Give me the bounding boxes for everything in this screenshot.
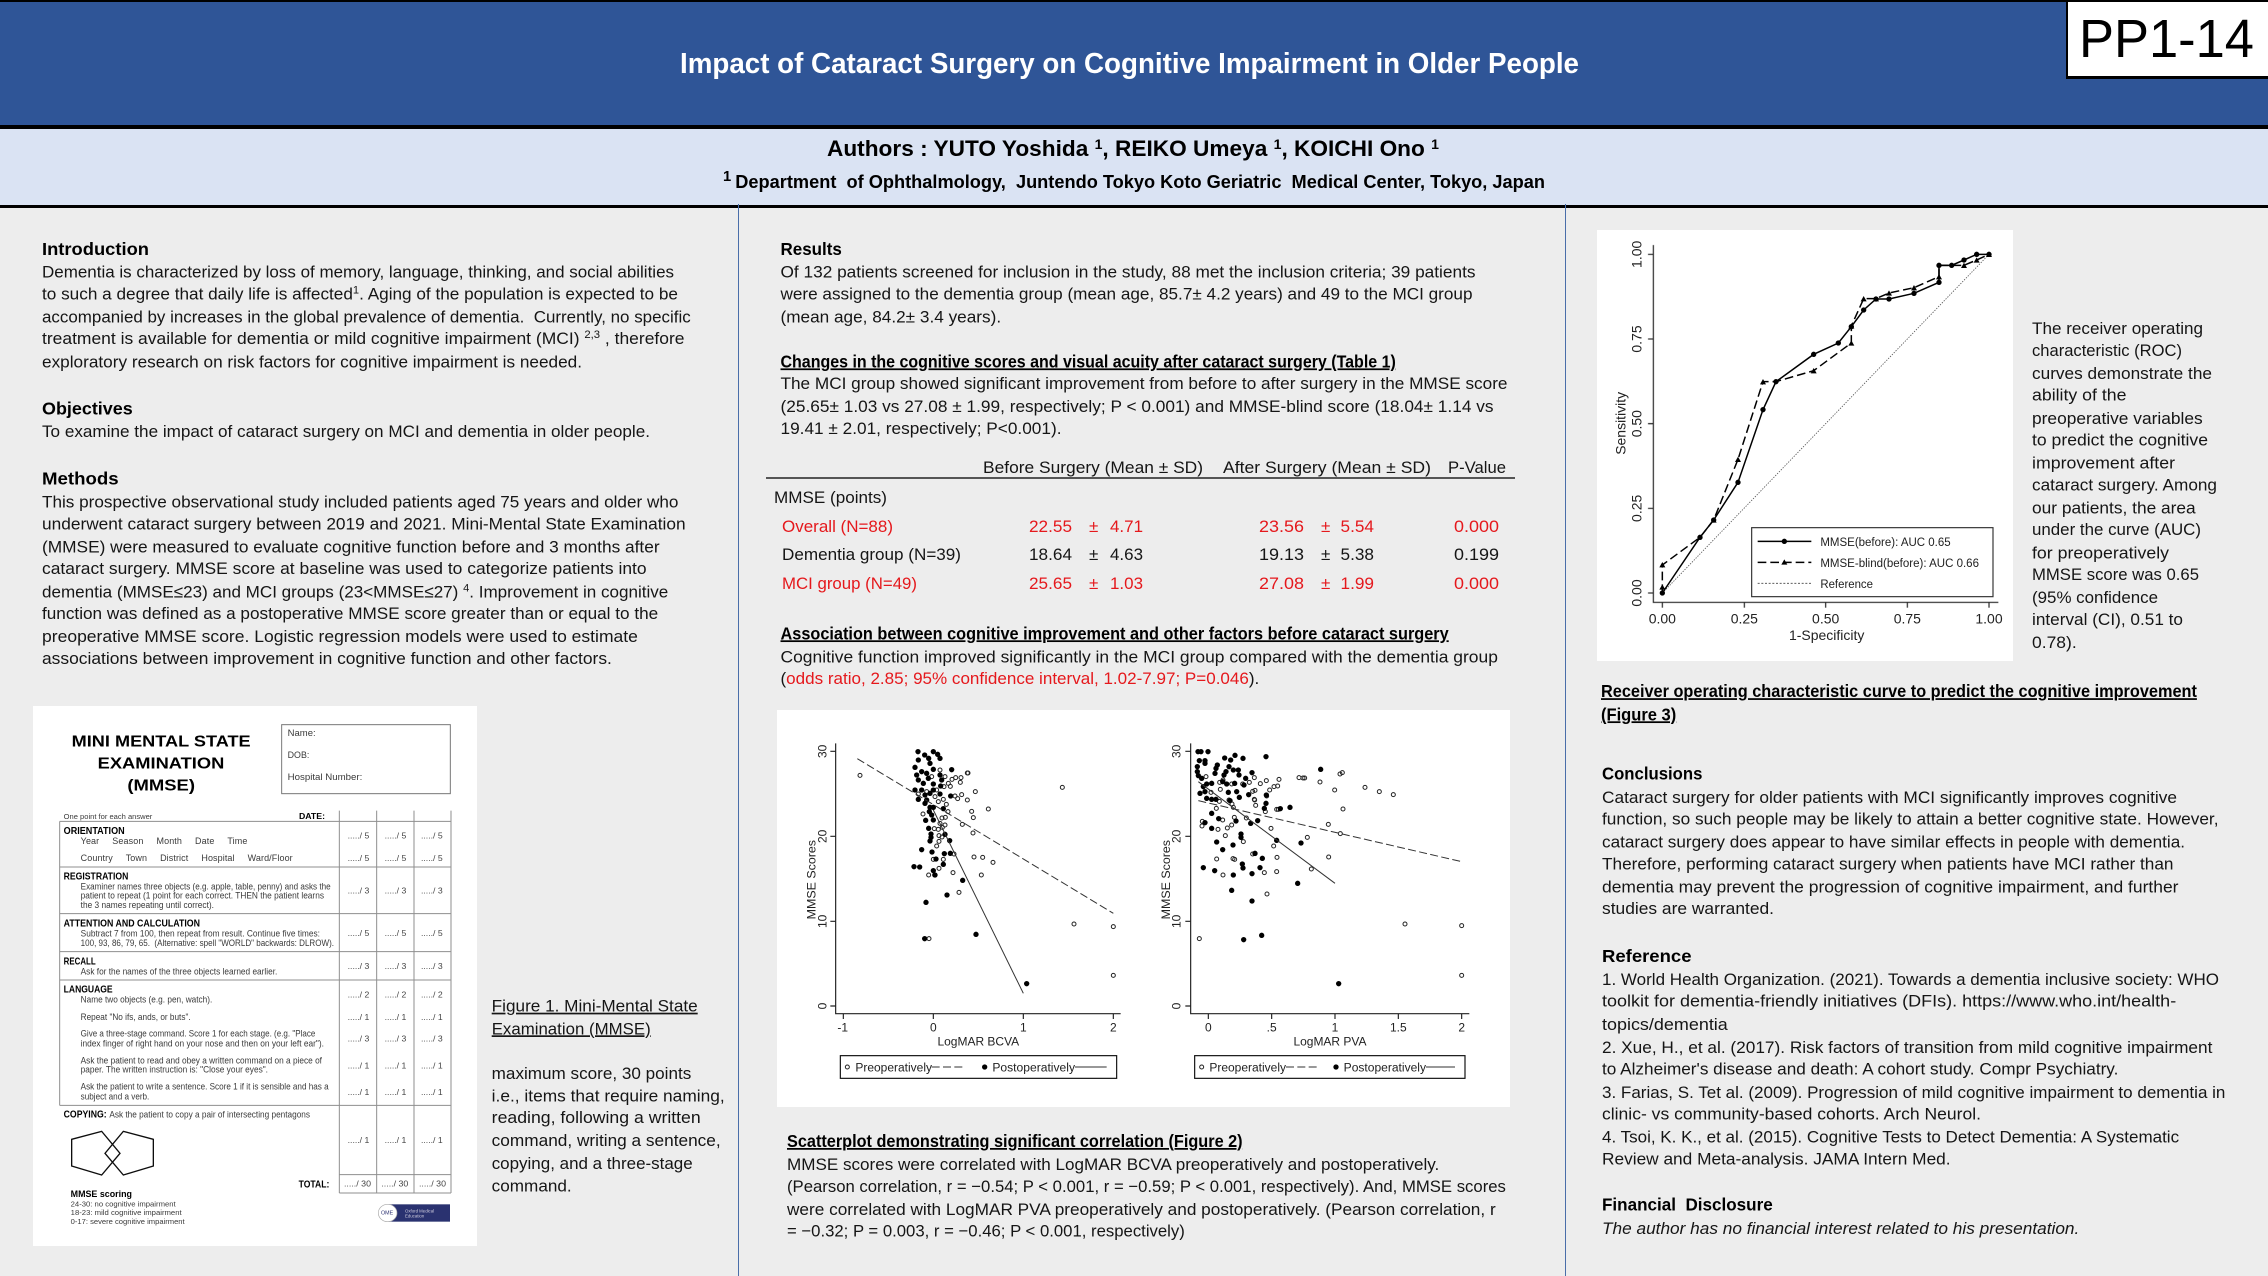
- row: overall: [782, 517, 1499, 536]
- table text: LANGUAGE: [64, 985, 113, 996]
- axis labels: 0.75: [1629, 325, 1645, 353]
- legend: Reference: [1820, 577, 1873, 591]
- patient details box: Name:: [288, 728, 316, 738]
- axis labels: 0.00: [1629, 579, 1645, 607]
- table text: Ask the patient to write a sentence. Score 1 if it is sensible and has a: [81, 1082, 329, 1092]
- icon: intersecting pentagons: [72, 1131, 153, 1175]
- text: ROC description: improvement after: [2032, 454, 2175, 473]
- legend: [1195, 1056, 1465, 1078]
- header banner: [0, 0, 2268, 129]
- table text: TOTAL:: [299, 1179, 329, 1190]
- table text: subject and a verb.: [81, 1091, 149, 1101]
- figure 1 caption: [492, 997, 725, 1196]
- row: overall: 22.55: [1029, 517, 1072, 536]
- legend: Postoperatively: [1344, 1061, 1426, 1075]
- text: ROC description: under the curve (AUC): [2032, 520, 2201, 539]
- axis labels: 0: [816, 1002, 830, 1009]
- figure 1 caption: maximum score, 30 points: [492, 1064, 691, 1083]
- column dividers: [738, 204, 1566, 1276]
- axis labels: 2: [1110, 1021, 1117, 1035]
- table text: Examiner names three objects (e.g. apple, table, penny) and asks the: [81, 881, 331, 891]
- authors: 1: [1431, 136, 1439, 152]
- text: results: (mean age, 84.2± 3.4 years).: [780, 308, 1001, 326]
- axis labels: 0.75: [1894, 610, 1921, 626]
- legend: [1752, 528, 1993, 597]
- postoperative points: [1195, 749, 1341, 986]
- figure 2 panel: [777, 710, 1510, 1107]
- figure 1 caption: reading, following a written: [492, 1108, 701, 1127]
- score columns: ...../ 1: [348, 1012, 369, 1022]
- axis labels: LogMAR BCVA: [937, 1035, 1019, 1049]
- row: dementia group: 4.63: [1110, 545, 1143, 564]
- MMSE scoring key: 0-17: severe cognitive impairment: [71, 1217, 186, 1226]
- patient details box: Hospital Number:: [288, 772, 362, 782]
- score columns: ...../ 3: [385, 1034, 406, 1044]
- curve: MMSE-blind before: [1659, 252, 1992, 593]
- text: methods: dementia (MMSE≤23) and MCI groups (23<MMSE≤27): [42, 582, 457, 601]
- text: methods: Methods: [42, 468, 119, 488]
- text: introduction: 1: [353, 284, 359, 296]
- score columns: ...../ 3: [385, 885, 406, 895]
- row: MCI group: MCI group (N=49): [782, 574, 917, 593]
- axis labels: MMSE Scores: [805, 840, 819, 919]
- score columns: ...../ 1: [348, 1135, 369, 1145]
- row: overall: 0.000: [1454, 517, 1499, 536]
- text: methods: 4: [463, 582, 469, 594]
- row: dementia group: ±: [1089, 545, 1098, 564]
- table header: After Surgery (Mean ± SD): [1223, 458, 1431, 477]
- table text: DATE:: [299, 811, 325, 821]
- table 1: MMSE before and after surgery: MMSE (points): [774, 488, 887, 507]
- table text: Give a three-stage command. Score 1 for each stage. (e.g. "Place: [81, 1029, 315, 1039]
- text: ROC description: MMSE score was 0.65: [2032, 565, 2199, 584]
- row: overall: 23.56: [1259, 517, 1304, 536]
- text: changes in cognitive scores: [780, 351, 1508, 438]
- legend: MMSE(before): AUC 0.65: [1820, 535, 1951, 549]
- text: conclusions: Cataract surgery for older patients with MCI significantly improves cognitive: [1602, 788, 2177, 807]
- text: changes in cognitive scores: Changes in the cognitive scores and visual acuity after cataract surgery (Table 1): [780, 351, 1396, 371]
- text: association: [780, 623, 1498, 688]
- axis labels: 0.25: [1629, 494, 1645, 522]
- text: introduction: exploratory research on risk factors for cognitive impairment is needed.: [42, 352, 582, 371]
- table text: REGISTRATION: [64, 871, 128, 882]
- text: results: Results: [780, 239, 842, 259]
- figure 1 caption: copying, and a three-stage: [492, 1154, 693, 1173]
- score columns: ...../ 5: [348, 853, 369, 863]
- authors: , KOICHI Ono: [1281, 136, 1431, 161]
- figure 3 caption: Receiver operating characteristic curve to predict the cognitive improvement: [1601, 681, 2197, 701]
- text: ROC description: interval (CI), 0.51 to: [2032, 610, 2183, 629]
- axis labels: 1: [1020, 1021, 1027, 1035]
- preoperative points: [858, 768, 1115, 977]
- form title: [72, 734, 251, 795]
- axis labels: 1: [1332, 1021, 1339, 1035]
- curve: MMSE before: [1660, 252, 1992, 596]
- table text: the 3 names repeating until correct).: [81, 900, 214, 910]
- axis labels: 0.50: [1812, 610, 1839, 626]
- icon: publisher logo: Oxford Medical: [405, 1208, 434, 1213]
- axis labels: 0: [930, 1021, 937, 1035]
- figure 2 caption: (Pearson correlation, r = −0.54; P < 0.001, r = −0.59; P < 0.001, respectively). And, MMSE scores: [787, 1177, 1506, 1196]
- row: dementia group: 19.13: [1259, 545, 1304, 564]
- text: objectives: To examine the impact of cataract surgery on MCI and dementia in older people.: [42, 422, 650, 441]
- affiliation: Department of Ophthalmology, Juntendo Tokyo Koto Geriatric Medical Center, Tokyo, Japan: [735, 171, 1545, 192]
- text: conclusions: [1602, 764, 2218, 918]
- score columns: ...../ 1: [385, 1060, 406, 1070]
- text: conclusions: cataract surgery does appear to have similar effects in people with dementia.: [1602, 833, 2185, 852]
- authors: , REIKO Umeya: [1102, 136, 1274, 161]
- axes: [830, 743, 1121, 1019]
- text: financial disclosure: [1602, 1195, 2079, 1238]
- trend lines: [857, 759, 1113, 993]
- score columns: ...../ 3: [421, 885, 443, 895]
- text: financial disclosure: Financial Disclosure: [1602, 1195, 1773, 1215]
- row: dementia group: ±: [1321, 545, 1330, 564]
- form title: (MMSE): [127, 778, 195, 795]
- text: conclusions: function, so such people may be likely to attain a better cognitive state. However,: [1602, 809, 2218, 828]
- score columns: ...../ 1: [421, 1135, 443, 1145]
- axis labels: MMSE Scores: [1159, 840, 1173, 919]
- axis labels: [1613, 241, 2003, 643]
- text: references: Review and Meta-analysis. JAMA Intern Med.: [1602, 1149, 1951, 1168]
- text: association: Cognitive function improved significantly in the MCI group compared with the dementia group: [780, 648, 1498, 666]
- text: methods: cataract surgery. MMSE score at baseline was used to categorize patients into: [42, 559, 647, 578]
- table text: COPYING:: [64, 1110, 107, 1121]
- table text: paper. The written instruction is: "Close your eyes".: [81, 1065, 268, 1075]
- legend: Postoperatively: [992, 1061, 1075, 1075]
- row: MCI group: ±: [1089, 574, 1098, 593]
- score columns: ...../ 1: [385, 1087, 406, 1097]
- table text: 100, 93, 86, 79, 65. (Alternative: spell "WORLD" backwards: DLROW).: [81, 938, 334, 948]
- text: methods: function was defined as a postoperative MMSE score greater than or equal to the: [42, 604, 658, 623]
- score columns: ...../ 2: [348, 989, 369, 999]
- row: MCI group: 25.65: [1029, 574, 1072, 593]
- figure 2 caption: Scatterplot demonstrating significant correlation (Figure 2): [787, 1131, 1243, 1151]
- authors: 1: [1095, 136, 1103, 152]
- table 1: MMSE before and after surgery: [766, 458, 1515, 593]
- text: references: 2. Xue, H., et al. (2017). Risk factors of transition from mild cognitive impairment: [1602, 1038, 2213, 1057]
- axis labels: 20: [816, 829, 830, 843]
- text: association: (odds ratio, 2.85; 95% confidence interval, 1.02-7.97; P=0.046).: [780, 669, 1259, 688]
- scatterplot: LogMAR BCVA: [805, 743, 1121, 1078]
- axis labels: -1: [837, 1021, 848, 1035]
- score columns: ...../ 1: [421, 1087, 443, 1097]
- text: methods: [42, 468, 686, 668]
- legend: Preoperatively: [1209, 1061, 1286, 1075]
- row: MCI group: 27.08: [1259, 574, 1304, 593]
- row: MCI group: 1.03: [1110, 574, 1143, 593]
- row: overall: 5.54: [1340, 517, 1374, 536]
- axis labels: 0.00: [1649, 610, 1676, 626]
- table text: ORIENTATION: [64, 826, 125, 837]
- poster number badge: PP1-14: [2079, 9, 2254, 69]
- MMSE scoring key: [71, 1189, 186, 1226]
- figure 1 caption: Figure 1. Mini-Mental State: [492, 997, 698, 1016]
- text: references: [1602, 946, 2225, 1168]
- text: references: Reference: [1602, 946, 1692, 966]
- preoperative points: [1197, 771, 1464, 977]
- score columns: ...../ 5: [421, 853, 443, 863]
- figure 1 caption: command, writing a sentence,: [492, 1131, 721, 1150]
- axis labels: 1.00: [1975, 610, 2003, 626]
- score columns: ...../ 30: [344, 1179, 371, 1189]
- figure 1 caption: command.: [492, 1177, 572, 1196]
- axis labels: LogMAR PVA: [1293, 1035, 1367, 1049]
- table grid: [60, 811, 451, 1193]
- authors: 1: [1274, 136, 1282, 152]
- score columns: ...../ 5: [421, 831, 443, 841]
- score columns: ...../ 2: [421, 989, 443, 999]
- text: ROC description: our patients, the area: [2032, 498, 2196, 518]
- text: introduction: accompanied by increases in the global prevalence of dementia. Currently, no specific: [42, 308, 691, 326]
- text: changes in cognitive scores: The MCI group showed significant improvement from before to after surgery in the MMSE score: [780, 374, 1508, 393]
- table text: One point for each answer: [64, 812, 153, 821]
- row: MCI group: 1.99: [1340, 574, 1374, 593]
- icon: publisher logo: [378, 1204, 450, 1222]
- text: introduction: [42, 239, 691, 371]
- table text: Ask for the names of the three objects learned earlier.: [81, 966, 277, 976]
- score columns: ...../ 2: [385, 989, 406, 999]
- score columns: ...../ 5: [385, 928, 406, 938]
- table text: ATTENTION AND CALCULATION: [64, 919, 200, 930]
- text: methods: . Improvement in cognitive: [469, 582, 668, 601]
- text: changes in cognitive scores: (25.65± 1.03 vs 27.08 ± 1.99, respectively; P < 0.001) and MMSE-blind score (18.04± 1.14 vs: [780, 397, 1494, 416]
- score columns: ...../ 3: [348, 1034, 369, 1044]
- score columns: ...../ 1: [421, 1012, 443, 1022]
- axis labels: .5: [1267, 1021, 1277, 1035]
- text: conclusions: studies are warranted.: [1602, 899, 1774, 918]
- text: methods: (MMSE) were measured to evaluate cognitive function before and 3 months after: [42, 538, 660, 556]
- text: objectives: [42, 398, 650, 441]
- text: references: 3. Farias, S. Tet al. (2009). Progression of mild cognitive impairment to dementia in: [1602, 1083, 2225, 1102]
- row: dementia group: 18.64: [1029, 545, 1072, 564]
- authors band: [0, 129, 2268, 208]
- scatterplot: LogMAR PVA: [1159, 743, 1469, 1078]
- figure 2 caption: were correlated with LogMAR PVA preoperatively and postoperatively. (Pearson correlation, r: [786, 1200, 1496, 1219]
- text: financial disclosure: The author has no financial interest related to his presentation.: [1602, 1219, 2079, 1238]
- text: references: topics/dementia: [1602, 1015, 1728, 1034]
- text: references: toolkit for dementia-friendly initiatives (DFIs). https://www.who.int/health-: [1602, 992, 2176, 1011]
- text: introduction: , therefore: [600, 329, 684, 348]
- text: ROC description: characteristic (ROC): [2032, 341, 2182, 360]
- MMSE scoring key: 24-30: no cognitive impairment: [71, 1199, 177, 1208]
- text: changes in cognitive scores: 19.41 ± 2.01, respectively; P<0.001).: [780, 419, 1062, 438]
- text: ROC description: curves demonstrate the: [2032, 364, 2212, 383]
- text: results: [779, 239, 1476, 326]
- figure 1 caption: Examination (MMSE): [492, 1019, 651, 1038]
- score columns: ...../ 5: [348, 831, 369, 841]
- score columns: ...../ 3: [421, 1034, 443, 1044]
- table text: Year Season Month Date Time: [81, 836, 247, 846]
- axis labels: 30: [1170, 744, 1184, 758]
- row: MCI group: 0.000: [1454, 574, 1499, 593]
- text: references: 4. Tsoi, K. K., et al. (2015). Cognitive Tests to Detect Dementia: A Systematic: [1602, 1128, 2180, 1147]
- score columns: ...../ 30: [381, 1179, 409, 1189]
- table header: Before Surgery (Mean ± SD): [983, 458, 1203, 477]
- legend: MMSE-blind(before): AUC 0.66: [1820, 556, 1979, 570]
- score columns: ...../ 1: [348, 1060, 369, 1070]
- trend lines: [1198, 782, 1462, 883]
- score columns: ...../ 5: [421, 928, 443, 938]
- text: methods: associations between improvement in cognitive function and other factors.: [42, 649, 612, 668]
- axis labels: 0: [1205, 1021, 1212, 1035]
- form title: EXAMINATION: [98, 755, 224, 772]
- axis labels: [1159, 744, 1465, 1049]
- icon: publisher logo: OME: [381, 1211, 394, 1217]
- text: conclusions: Conclusions: [1602, 764, 1703, 784]
- score columns: ...../ 5: [385, 831, 406, 841]
- axis labels: 1.5: [1390, 1021, 1407, 1035]
- score columns: ...../ 1: [348, 1087, 369, 1097]
- row: dementia group: Dementia group (N=39): [782, 545, 961, 564]
- text: ROC description: (95% confidence: [2032, 588, 2158, 607]
- axis labels: 20: [1170, 829, 1184, 843]
- text: references: to Alzheimer's disease and death: A cohort study. Compr Psychiatry.: [1602, 1060, 2118, 1079]
- axis labels: 1.00: [1629, 241, 1645, 268]
- table text: [64, 811, 334, 1190]
- row: overall: 4.71: [1110, 517, 1143, 536]
- text: introduction: Dementia is characterized by loss of memory, language, thinking, and social abilities: [42, 263, 674, 282]
- text: results: were assigned to the dementia group (mean age, 85.7± 4.2 years) and 49 to the MCI group: [779, 284, 1472, 303]
- figure 3 panel: ROC curve: [1597, 230, 2013, 661]
- authors: Authors : YUTO Yoshida: [827, 136, 1087, 161]
- score columns: ...../ 30: [419, 1179, 446, 1189]
- table text: index finger of right hand on your nose and then on your left ear").: [81, 1038, 324, 1048]
- text: ROC description: to predict the cognitive: [2032, 430, 2208, 450]
- table text: Name two objects (e.g. pen, watch).: [81, 995, 212, 1005]
- text: ROC description: for preoperatively: [2032, 543, 2170, 562]
- axes: [1648, 245, 1998, 608]
- row: MCI group: ±: [1321, 574, 1330, 593]
- axis labels: 1-Specificity: [1789, 627, 1864, 643]
- axis labels: 10: [816, 914, 830, 928]
- axis labels: Sensitivity: [1613, 392, 1629, 455]
- row: overall: Overall (N=88): [782, 517, 893, 536]
- row: overall: ±: [1321, 517, 1330, 536]
- text: ROC description: cataract surgery. Among: [2032, 475, 2217, 494]
- figure 3 caption: (Figure 3): [1601, 704, 1676, 724]
- score columns: ...../ 1: [385, 1012, 406, 1022]
- legend: Preoperatively: [855, 1061, 932, 1075]
- text: ROC description: ability of the: [2032, 386, 2126, 405]
- table text: Country Town District Hospital Ward/Floor: [81, 853, 293, 863]
- text: ROC description: preoperative variables: [2032, 409, 2203, 428]
- text: introduction: to such a degree that daily life is affected: [42, 284, 350, 303]
- axis labels: 0.50: [1629, 410, 1645, 437]
- postoperative points: [911, 749, 1029, 986]
- axis labels: [805, 744, 1117, 1049]
- score columns: ...../ 3: [348, 885, 369, 895]
- row: overall: ±: [1089, 517, 1098, 536]
- form title: MINI MENTAL STATE: [72, 734, 251, 751]
- row: dementia group: [782, 545, 1499, 564]
- text: references: clinic- vs community-based cohorts. Arch Neurol.: [1602, 1104, 1981, 1124]
- figure 1 caption: i.e., items that require naming,: [492, 1087, 725, 1106]
- axis labels: 2: [1458, 1021, 1465, 1035]
- score columns: ...../ 3: [385, 961, 406, 971]
- text: introduction: Introduction: [42, 239, 149, 259]
- legend: [840, 1056, 1117, 1078]
- text: methods: preoperative MMSE score. Logistic regression models were used to estimate: [42, 627, 638, 646]
- text: ROC description: 0.78).: [2032, 633, 2077, 652]
- patient details box: [282, 725, 450, 794]
- table text: RECALL: [64, 957, 96, 968]
- figure 2 caption: [786, 1131, 1506, 1241]
- axis labels: 0.25: [1731, 610, 1758, 626]
- text: conclusions: Therefore, performing cataract surgery when patients have MCI rather than: [1602, 854, 2174, 873]
- MMSE scoring key: MMSE scoring: [71, 1189, 132, 1199]
- score columns: ...../ 5: [385, 853, 406, 863]
- table text: patient to repeat (1 point for each correct. THEN the patient learns: [81, 891, 324, 901]
- axis labels: 30: [816, 744, 830, 758]
- score columns: ...../ 3: [348, 961, 369, 971]
- score columns: ...../ 1: [421, 1060, 443, 1070]
- table text: Ask the patient to read and obey a written command on a piece of: [81, 1055, 322, 1065]
- score columns: ...../ 3: [421, 961, 443, 971]
- text: introduction: . Aging of the population is expected to be: [359, 284, 678, 303]
- patient details box: DOB:: [288, 750, 309, 760]
- figure 2 caption: MMSE scores were correlated with LogMAR BCVA preoperatively and postoperatively.: [787, 1155, 1439, 1174]
- row: dementia group: 5.38: [1340, 545, 1374, 564]
- reference line: [1662, 254, 1989, 593]
- affiliation: 1: [723, 168, 735, 185]
- text: objectives: Objectives: [42, 398, 133, 418]
- axis labels: 10: [1170, 914, 1184, 928]
- icon: publisher logo: Education: [405, 1214, 425, 1219]
- text: conclusions: dementia may prevent the progression of cognitive impairment, and further: [1602, 877, 2179, 896]
- table text: Ask the patient to copy a pair of intersecting pentagons: [109, 1110, 310, 1120]
- MMSE scoring key: 18-23: mild cognitive impairment: [71, 1208, 183, 1217]
- axes: [1185, 743, 1469, 1019]
- poster number badge: [2066, 0, 2268, 79]
- figure 3 caption: [1601, 681, 2197, 724]
- text: introduction: 2,3: [584, 329, 600, 341]
- score columns: ...../ 1: [385, 1135, 406, 1145]
- score columns: [344, 831, 446, 1189]
- score columns: ...../ 5: [348, 928, 369, 938]
- figure 2 caption: = −0.32; P = 0.003, r = −0.46; P < 0.001, respectively): [787, 1222, 1185, 1241]
- text: introduction: treatment is available for dementia or mild cognitive impairment (MCI): [42, 329, 565, 348]
- row: dementia group: 0.199: [1454, 545, 1499, 564]
- text: methods: This prospective observational study included patients aged 75 years and older who: [42, 493, 678, 512]
- table header: P-Value: [1448, 458, 1506, 477]
- row: MCI group: [782, 574, 1499, 593]
- title: Impact of Cataract Surgery on Cognitive Impairment in Older People: [680, 48, 1579, 80]
- table header: [983, 458, 1506, 477]
- text: results: Of 132 patients screened for inclusion in the study, 88 met the inclusion criteria; 39 patients: [780, 263, 1476, 282]
- text: association: Association between cognitive improvement and other factors before cataract surgery: [780, 623, 1449, 643]
- table text: Repeat "No ifs, ands, or buts".: [81, 1012, 191, 1022]
- text: ROC description: The receiver operating: [2032, 319, 2203, 338]
- figure 1: MMSE form: [33, 706, 477, 1246]
- axis labels: 0: [1170, 1002, 1184, 1009]
- text: ROC description: [2032, 319, 2217, 652]
- text: methods: underwent cataract surgery between 2019 and 2021. Mini-Mental State Examination: [42, 514, 686, 533]
- text: references: 1. World Health Organization. (2021). Towards a dementia inclusive society: WHO: [1602, 970, 2219, 989]
- table text: Subtract 7 from 100, then repeat from result. Continue five times:: [81, 929, 320, 939]
